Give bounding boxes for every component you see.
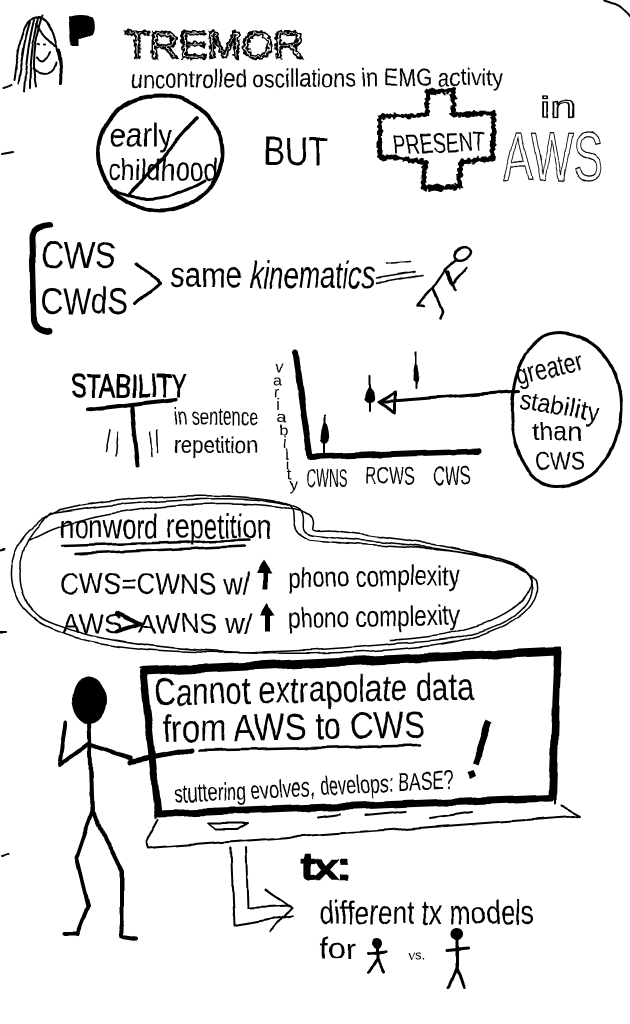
callout: greater stability: CWS [535,446,585,476]
treatment heading: tx: [302,846,350,887]
motion lines [376,262,422,283]
stability heading [71,368,187,466]
arrow to chart [379,391,518,413]
chart: variability: y [289,477,297,494]
cws cwds labels: CWdS [41,281,128,322]
icon: small child figure [368,945,386,972]
cws cwds labels [41,235,128,322]
in aws text: in [540,89,576,124]
for vs line: for [320,933,356,966]
stability heading: STABILITY [71,368,187,404]
same kinematics text: kinematics [250,255,375,297]
callout: greater stability: greater [513,345,586,390]
callout: greater stability: than [532,418,582,446]
icon: presenter portrait [14,15,95,92]
exclamation mark [467,720,492,779]
chart: variability: i [286,457,290,474]
in aws text [503,89,603,195]
chart: variability: a [274,373,283,390]
cws cwds labels: CWS [41,235,116,276]
panel: chalkboard: stuttering evolves, develops: BASE? [174,764,455,809]
aws line: AWS>AWNS w/ [62,608,252,639]
greater than brace [135,264,160,303]
same kinematics text: same [170,254,242,295]
chalkboard text: Cannot extrapolate data [153,666,475,714]
chart: variability: a [278,409,287,426]
margin marks [0,85,13,856]
nonword heading: nonword repetition [60,508,272,546]
chart: variability: i [283,435,287,452]
panel: nonword repetition [11,496,537,653]
icon: teacher stick figure [60,676,192,938]
sentence repetition text [174,404,258,459]
panel: chalkboard: from AWS to CWS [162,704,425,751]
chart: variability: t [287,467,292,484]
icon: crossed out early childhood: early [109,117,173,153]
treatment text: different tx models [320,894,534,931]
chart: variability: b [280,423,289,440]
panel: nonword repetition: phono complexity [288,560,460,595]
chart: variability: RCWS [365,462,415,490]
chart: variability: i [277,397,281,414]
child figure head [372,938,382,948]
icon: running figure [418,248,471,318]
sentence repetition text: in sentence [174,404,258,431]
cws line: CWS=CWNS w/ [60,568,251,601]
sentence repetition text: repetition [174,432,258,459]
icon: present cross: PRESENT [392,127,485,160]
same kinematics text [170,254,375,297]
chalk tray [146,806,580,848]
panel: nonword repetition: phono complexity [288,600,460,635]
chart: variability: v [275,359,283,376]
chart: variability [274,352,478,494]
chart: variability: CWNS [306,465,348,493]
page corner [604,0,630,18]
for vs line [320,933,386,972]
callout: greater stability: stability [517,384,601,428]
vs label: vs. [408,947,426,963]
title: tremor: TREMOR [124,25,304,67]
chart: variability: l [285,447,289,464]
icon: crossed out early childhood: childhood [108,152,218,187]
but text: BUT [263,130,328,174]
panel: chalkboard [140,648,580,848]
chart: variability: r [274,385,280,402]
chart: variability: CWS [434,461,471,491]
icon: present cross [380,90,493,188]
callout: greater stability [512,333,621,487]
arrow: board to treatment [231,848,292,932]
definition text: uncontrolled oscillations in EMG activity [131,63,503,94]
icon: adult figure [447,928,468,988]
icon: crossed out early childhood [98,95,222,211]
bracket [32,225,50,331]
